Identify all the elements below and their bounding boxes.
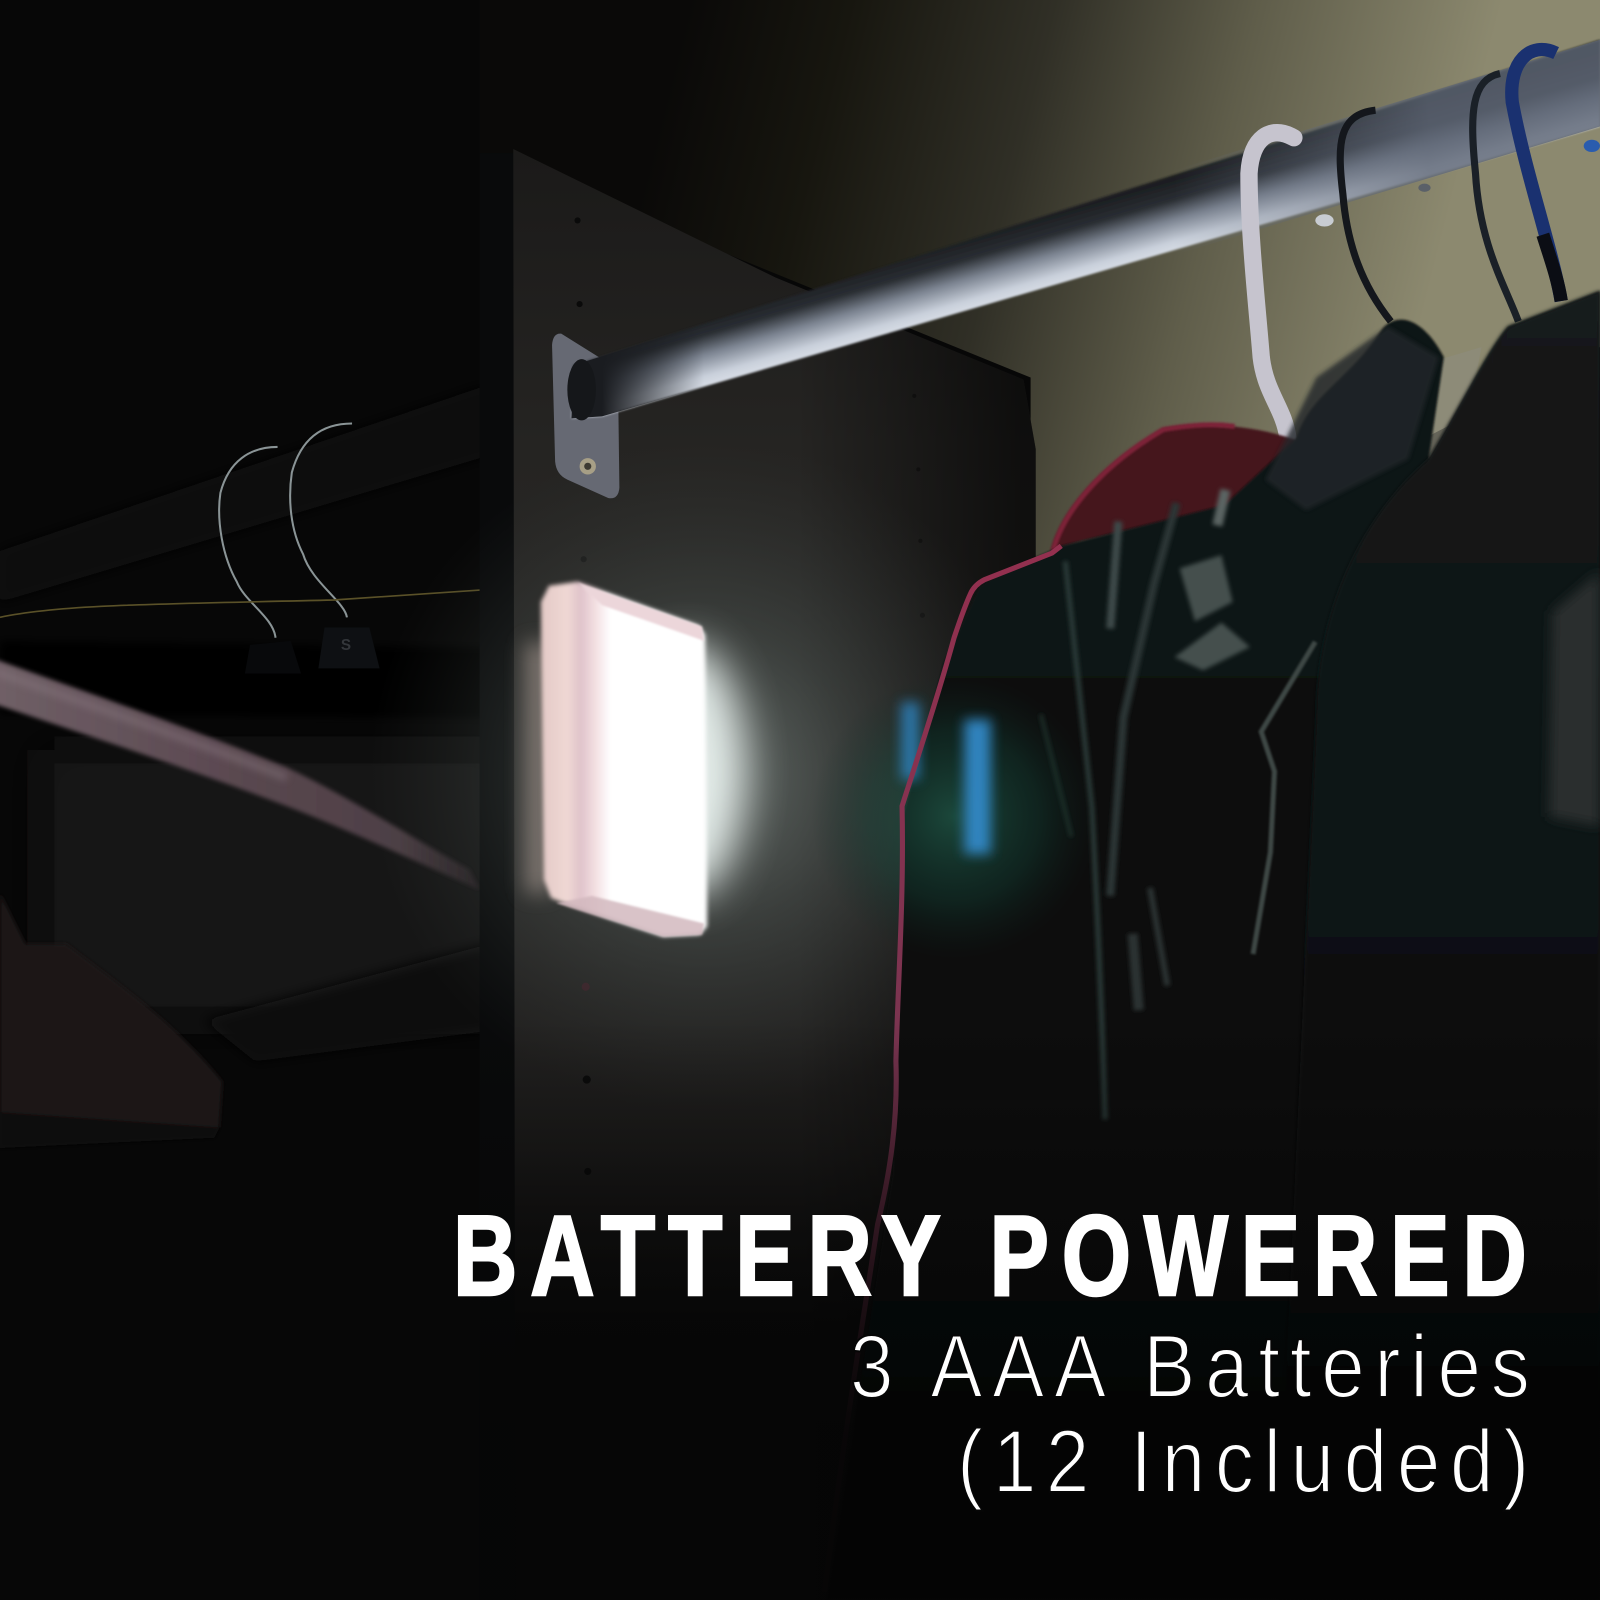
dark closet interior on the left <box>0 641 510 1061</box>
dark hanger with metallic shine <box>1473 73 1518 321</box>
white hanger at lower left <box>0 893 222 1148</box>
left rod and hangers: S <box>341 637 351 654</box>
subheading: battery type: 3 AAA Batteries <box>850 1316 1530 1416</box>
battery light unit <box>541 582 707 937</box>
dark sweater <box>1265 327 1439 510</box>
side panel face <box>513 149 1036 1600</box>
plaid shirt body <box>827 291 1600 1600</box>
pink hanger on the left <box>0 659 480 890</box>
maroon collar <box>1051 425 1298 551</box>
soft glow on left of the lamp <box>526 643 551 893</box>
shelf peg holes <box>574 217 925 1175</box>
blue hanger <box>1512 50 1561 301</box>
pink shirt seam <box>824 546 1061 1592</box>
shirt pocket chevrons <box>1180 555 1233 621</box>
subheading: batteries included: (12 Included) <box>957 1411 1529 1511</box>
white plastic hanger <box>1249 133 1294 437</box>
text block <box>453 1191 1530 1511</box>
far right sleeve <box>1549 571 1600 827</box>
heading: BATTERY POWERED <box>453 1191 1527 1319</box>
clear hanger piece <box>1422 347 1482 467</box>
hanging clothes <box>827 291 1600 1600</box>
light glow <box>627 643 745 898</box>
lens flare: green haze and blue streaks <box>811 673 1097 959</box>
bottom fade <box>480 1020 1600 1600</box>
black hanger <box>1340 110 1391 321</box>
left rod and hangers <box>0 388 510 673</box>
closet rod <box>567 40 1600 420</box>
drawstring <box>1253 642 1315 954</box>
back wall <box>480 0 1600 633</box>
droplets under rod <box>1315 140 1600 227</box>
side panel edge <box>480 153 515 1600</box>
shirt stripes <box>1041 490 1226 1119</box>
rod mounting bracket <box>552 334 619 498</box>
dark jacket <box>1276 291 1600 1600</box>
light haze on the panel <box>367 439 1041 1112</box>
